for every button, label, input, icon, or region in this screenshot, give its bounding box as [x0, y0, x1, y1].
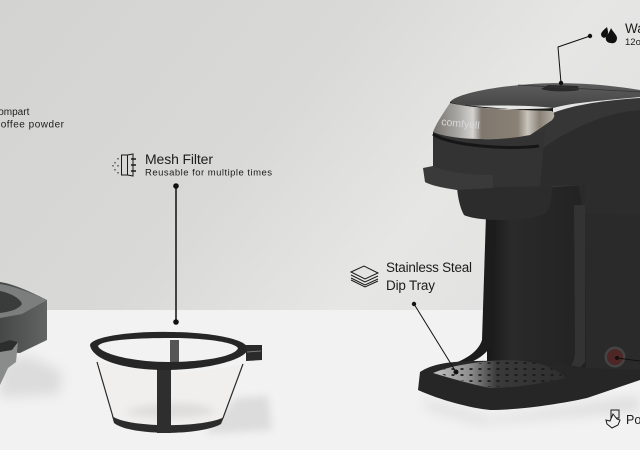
callout: drip tray [351, 260, 472, 374]
lid [450, 83, 640, 108]
mesh heading: Mesh Filter [145, 151, 213, 167]
tray base [418, 360, 640, 410]
mesh subtext: Reusable for multiple times [145, 168, 272, 178]
callout: compact coffee powder [0, 107, 65, 130]
tray heading line one: Stainless Steal [386, 260, 472, 275]
upper body [500, 98, 640, 215]
filter shadow [205, 396, 272, 434]
column left wing [446, 215, 496, 368]
filter handle [246, 345, 262, 361]
filter base ring [112, 416, 224, 433]
icon: stacked trays [351, 266, 378, 287]
tray leader line [412, 302, 458, 374]
brand name on steel panel: comfyell [441, 116, 480, 132]
water leader line [558, 34, 592, 85]
callout: power button [606, 358, 640, 428]
icon: hand pressing [606, 410, 620, 428]
product: mesh filter basket [90, 332, 272, 434]
callout: water tank [558, 21, 640, 85]
product: accessory at left edge [0, 282, 62, 398]
icon: water drops [601, 27, 617, 43]
icon: mesh filter [113, 154, 136, 176]
product: coffee machine [418, 83, 640, 424]
filter rear strut [170, 340, 179, 362]
tray holes [436, 361, 564, 387]
brew cup [457, 186, 552, 220]
callout: mesh filter [113, 151, 272, 325]
power leader line [617, 358, 640, 361]
wall background [0, 0, 640, 311]
drawer handle [423, 166, 493, 190]
right body [576, 170, 640, 398]
filter rim [90, 332, 248, 370]
table surface [0, 310, 640, 450]
tray heading line two: Dip Tray [386, 278, 435, 293]
tray steel plate [433, 360, 566, 388]
filter mesh [96, 360, 243, 428]
lower head section [433, 130, 545, 190]
filter front strut [157, 368, 171, 433]
column right wing [566, 205, 585, 382]
steel panel [433, 103, 554, 139]
power button [604, 346, 626, 368]
water lid knob [541, 85, 579, 91]
mesh leader line [173, 183, 179, 325]
machine shadow [425, 396, 640, 424]
column back [487, 180, 587, 370]
